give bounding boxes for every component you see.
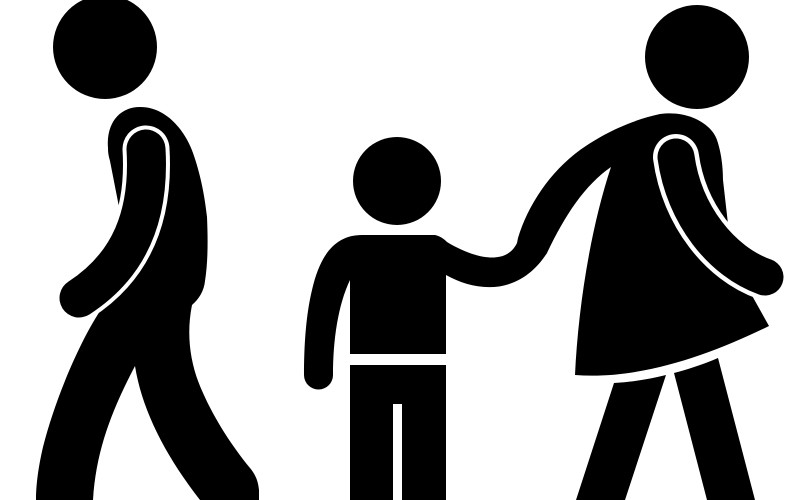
boy head [353, 137, 441, 225]
man torso and legs [36, 107, 259, 500]
woman head [645, 5, 749, 109]
woman left leg [576, 375, 666, 500]
figure: man [36, 0, 259, 500]
woman dress and reaching arm [518, 113, 769, 376]
boy legs [350, 365, 446, 500]
boy torso and arms [304, 235, 547, 390]
man arm [79, 149, 146, 298]
woman arm [676, 157, 765, 277]
man head [53, 0, 157, 99]
woman right leg [674, 358, 755, 500]
figure: woman [518, 5, 769, 500]
figure: boy [304, 137, 547, 500]
